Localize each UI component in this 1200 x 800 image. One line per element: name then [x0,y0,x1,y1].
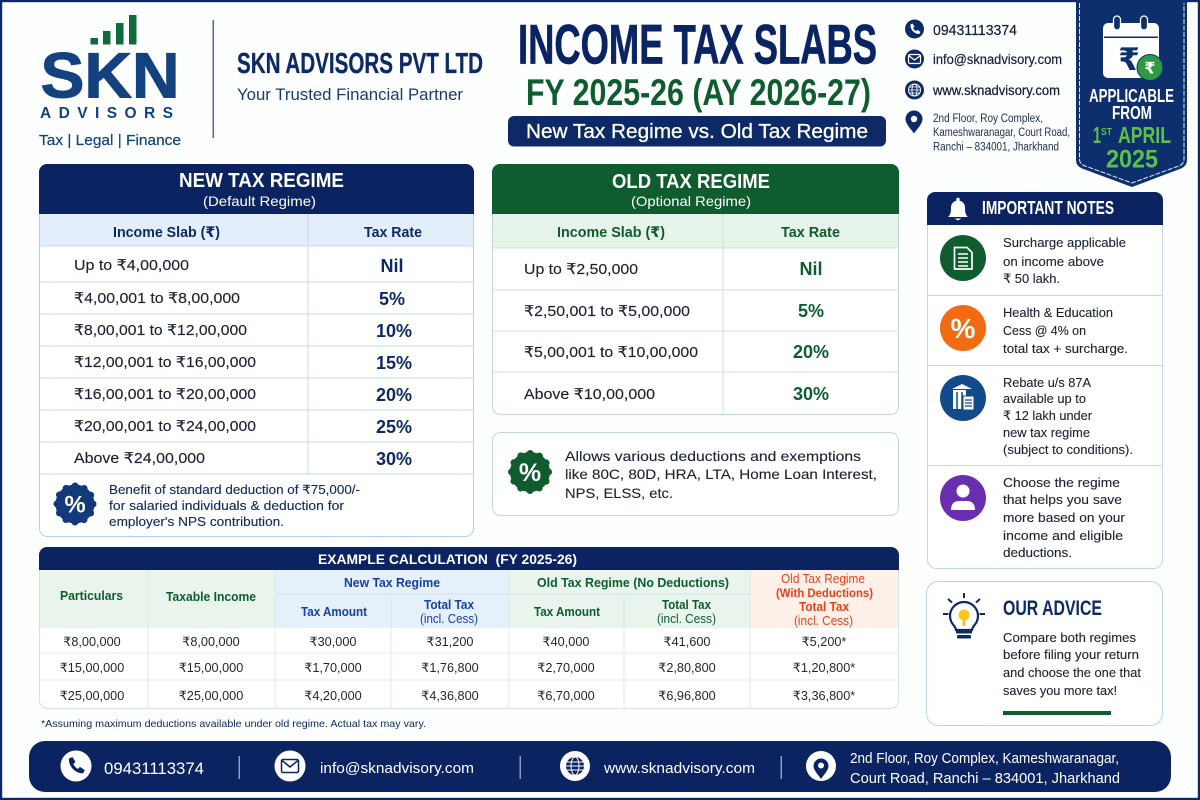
table headers: Total Tax [662,597,712,612]
note: surcharge: Surcharge applicable [1003,235,1126,250]
table headers: Taxable Income [166,589,256,604]
table row: 15 lakh: ₹15,00,000 [179,661,243,675]
note: rebate: (subject to conditions). [1003,442,1133,457]
note: cess: total tax + surcharge. [1003,341,1128,356]
footer address: Court Road, Ranchi – 834001, Jharkhand [850,770,1120,787]
new regime slab rows: 5% [379,289,405,309]
note: cess [940,305,1128,356]
table row: 15 lakh: ₹15,00,000 [60,661,124,675]
table row: 15 lakh: ₹2,70,000 [537,661,595,675]
panel header: new regime: (Default Regime) [203,193,316,209]
table headers: Tax Amount [301,604,368,619]
table headers: Old Tax Regime (No Deductions) [537,575,729,590]
badge: applicable from 1st April 2025: ₹ [1118,42,1140,77]
table row: 25 lakh: ₹25,00,000 [179,689,243,703]
note: choose regime: that helps you save [1003,492,1122,507]
table title bar [39,547,899,570]
panel: new tax regime [39,164,474,536]
subtitle: financial year: FY 2025-26 (AY 2026-27) [526,72,871,113]
icon: percent badge navy: % [64,492,86,518]
old regime slab rows: 30% [793,384,829,404]
advice heading: OUR ADVICE [1003,597,1102,620]
column headers: old regime [493,214,898,248]
note: surcharge: ₹ 50 lakh. [1003,271,1060,286]
new regime slab rows: Up to ₹4,00,000 [74,257,189,274]
note: standard deduction: Benefit of standard deduction of ₹75,000/- [109,483,360,497]
table headers: Old Tax Regime [781,571,865,586]
table row: 15 lakh: ₹1,20,800* [793,661,855,675]
footer address: 2nd Floor, Roy Complex, Kameshwaranagar, [850,750,1119,767]
footer phone [60,750,204,782]
note: choose regime [940,475,1126,560]
footer email [274,750,474,782]
panel: our advice [926,582,1162,726]
table row: 25 lakh: ₹6,70,000 [537,689,595,703]
note: standard deduction [109,483,360,529]
footer website [560,751,755,781]
column headers: new regime [40,214,473,246]
badge: applicable from 1st April 2025: APRIL [1118,122,1171,148]
panel header: new regime: NEW TAX REGIME [179,170,344,192]
contact block: 09431113374 [933,22,1017,39]
new regime slab rows: 20% [376,385,412,405]
table row: 8 lakh: ₹5,200* [802,635,846,649]
table row: 8 lakh: ₹30,000 [310,635,356,649]
table row: 15 lakh [60,661,855,675]
advice text: saves you more tax! [1003,683,1117,698]
note: choose regime: Choose the regime [1003,475,1120,490]
panel header: old regime: OLD TAX REGIME [612,171,770,193]
old regime slab rows: Above ₹10,00,000 [524,386,655,403]
advice text [1003,630,1141,698]
table row: 8 lakh: ₹31,200 [427,635,473,649]
badge: applicable from 1st April 2025: 2025 [1106,146,1158,174]
new regime slab rows: ₹12,00,001 to ₹16,00,000 [74,354,256,371]
table headers: Tax Amount [534,604,601,619]
badge: applicable from 1st April 2025: ST [1101,127,1112,138]
text: deductions: like 80C, 80D, HRA, LTA, Home Loan Interest, [565,466,877,482]
footnote: *Assuming maximum deductions available under old regime. Actual tax may vary. [41,718,426,730]
icon: percent badge green: % [519,459,541,487]
contact block: info@sknadvisory.com [933,52,1062,67]
note: cess: % [951,313,976,344]
table row: 25 lakh: ₹4,20,000 [304,689,362,703]
new regime slab rows [74,256,412,469]
advice text: before filing your return [1003,647,1139,662]
table row: 25 lakh: ₹3,36,800* [793,689,855,703]
tagline: Your Trusted Financial Partner [237,85,463,104]
table row: 8 lakh: ₹41,600 [664,635,710,649]
panel header: old regime [492,164,899,214]
note: standard deduction: employer's NPS contribution. [109,515,284,529]
note: rebate [940,375,1133,457]
old regime slab rows: Nil [799,259,823,279]
icon: percent badge green [510,452,550,492]
table row: 8 lakh: ₹8,00,000 [182,635,240,649]
panel: deductions note [492,432,898,516]
logo: SKN Advisors [39,15,181,149]
table: example calculation [39,547,899,708]
footer bar [29,741,1171,792]
note: surcharge [940,235,1126,286]
table headers [40,570,898,708]
column headers: old regime: Tax Rate [781,225,840,241]
badge: applicable from 1st April 2025 [1076,0,1187,187]
notes header [927,192,1163,225]
note: choose regime: income and eligible [1003,528,1123,543]
new regime slab rows: 25% [376,417,412,437]
new regime slab rows: Nil [380,256,404,276]
company name: SKN ADVISORS PVT LTD [237,48,483,80]
new regime slab rows: 15% [376,353,412,373]
panel header: old regime: (Optional Regime) [631,193,751,209]
footer phone: 09431113374 [104,760,204,778]
footer website: www.sknadvisory.com [603,760,755,777]
icon: percent badge navy [56,484,94,524]
old regime slab rows: Up to ₹2,50,000 [524,261,638,278]
note: rebate: new tax regime [1003,425,1090,440]
table row: 25 lakh: ₹4,36,800 [421,689,479,703]
column headers: new regime: Tax Rate [364,225,422,241]
advice text: Compare both regimes [1003,630,1136,645]
old regime slab rows: ₹5,00,001 to ₹10,00,000 [524,344,698,361]
column headers: new regime: Income Slab (₹) [113,225,220,241]
panel: important notes [927,192,1163,568]
note: choose regime: deductions. [1003,545,1072,560]
old regime slab rows: 5% [798,301,824,321]
badge: applicable from 1st April 2025: 1 [1093,122,1101,148]
table row: 8 lakh: ₹8,00,000 [63,635,121,649]
icon: light bulb [943,593,985,638]
table headers: (incl. Cess) [657,612,716,626]
note: rebate: Rebate u/s 87A [1003,375,1091,390]
new regime slab rows: Above ₹24,00,000 [74,450,205,467]
contact block: 2nd Floor, Roy Complex, [933,113,1043,125]
table headers: (incl. Cess) [420,612,478,626]
table row: 15 lakh: ₹1,76,800 [421,661,479,675]
new regime slab rows: ₹16,00,001 to ₹20,00,000 [74,386,256,403]
text: deductions: NPS, ELSS, etc. [565,485,673,501]
table row: 25 lakh: ₹25,00,000 [60,689,124,703]
note: cess: Health & Education [1003,305,1113,320]
table row: 15 lakh: ₹2,80,800 [658,661,716,675]
banner: new vs old: New Tax Regime vs. Old Tax Regime [526,120,868,143]
contact block: Ranchi – 834001, Jharkhand [933,142,1059,154]
new regime slab rows: ₹8,00,001 to ₹12,00,000 [74,322,247,339]
panel header: new regime [39,164,474,214]
note: cess: Cess @ 4% on [1003,323,1086,338]
new regime slab rows: ₹20,00,001 to ₹24,00,000 [74,418,256,435]
table headers: Particulars [60,588,123,603]
logo: SKN Advisors: Tax | Legal | Finance [39,133,181,149]
logo: SKN Advisors: SKN [40,40,180,112]
text: deductions: Allows various deductions and exemptions [565,448,861,464]
old regime slab rows: ₹2,50,001 to ₹5,00,000 [524,303,690,320]
new regime slab rows: 30% [376,449,412,469]
table headers: Total Tax [424,597,475,612]
title: INCOME TAX SLABS [518,12,877,76]
table row: 8 lakh [63,635,846,649]
old regime slab rows [524,259,829,404]
note: standard deduction: for salaried individuals & deduction for [109,499,344,513]
banner: new vs old [508,116,886,146]
new regime slab rows: ₹4,00,001 to ₹8,00,000 [74,290,240,307]
note: surcharge: on income above [1003,254,1104,269]
badge: applicable from 1st April 2025: FROM [1112,102,1152,123]
table title bar: EXAMPLE CALCULATION (FY 2025-26) [318,552,577,567]
notes header: IMPORTANT NOTES [982,198,1114,218]
table row: 25 lakh [60,689,855,703]
footer address [806,750,1120,787]
note: rebate: available up to [1003,391,1086,406]
note: rebate: ₹ 12 lakh under [1003,408,1093,423]
table headers: (incl. Cess) [794,614,853,628]
logo: SKN Advisors: ADVISORS [40,105,173,122]
advice text: and choose the one that [1003,665,1141,680]
footer email: info@sknadvisory.com [320,760,474,777]
note: choose regime: more based on your [1003,510,1126,525]
contact block: www.sknadvisory.com [932,83,1060,98]
table headers: (With Deductions) [776,586,873,600]
column headers: old regime: Income Slab (₹) [557,225,665,241]
new regime slab rows: 10% [376,321,412,341]
contact block: Kameshwaranagar, Court Road, [933,127,1070,139]
text: deductions [565,448,877,501]
table row: 8 lakh: ₹40,000 [543,635,589,649]
contact block [905,20,1070,154]
table row: 15 lakh: ₹1,70,000 [304,661,362,675]
badge: applicable from 1st April 2025: ₹ [1144,60,1156,78]
old regime slab rows: 20% [793,342,829,362]
panel: old tax regime [492,164,899,414]
table headers: Total Tax [799,599,850,614]
table row: 25 lakh: ₹6,96,800 [658,689,716,703]
table headers: New Tax Regime [344,575,440,590]
